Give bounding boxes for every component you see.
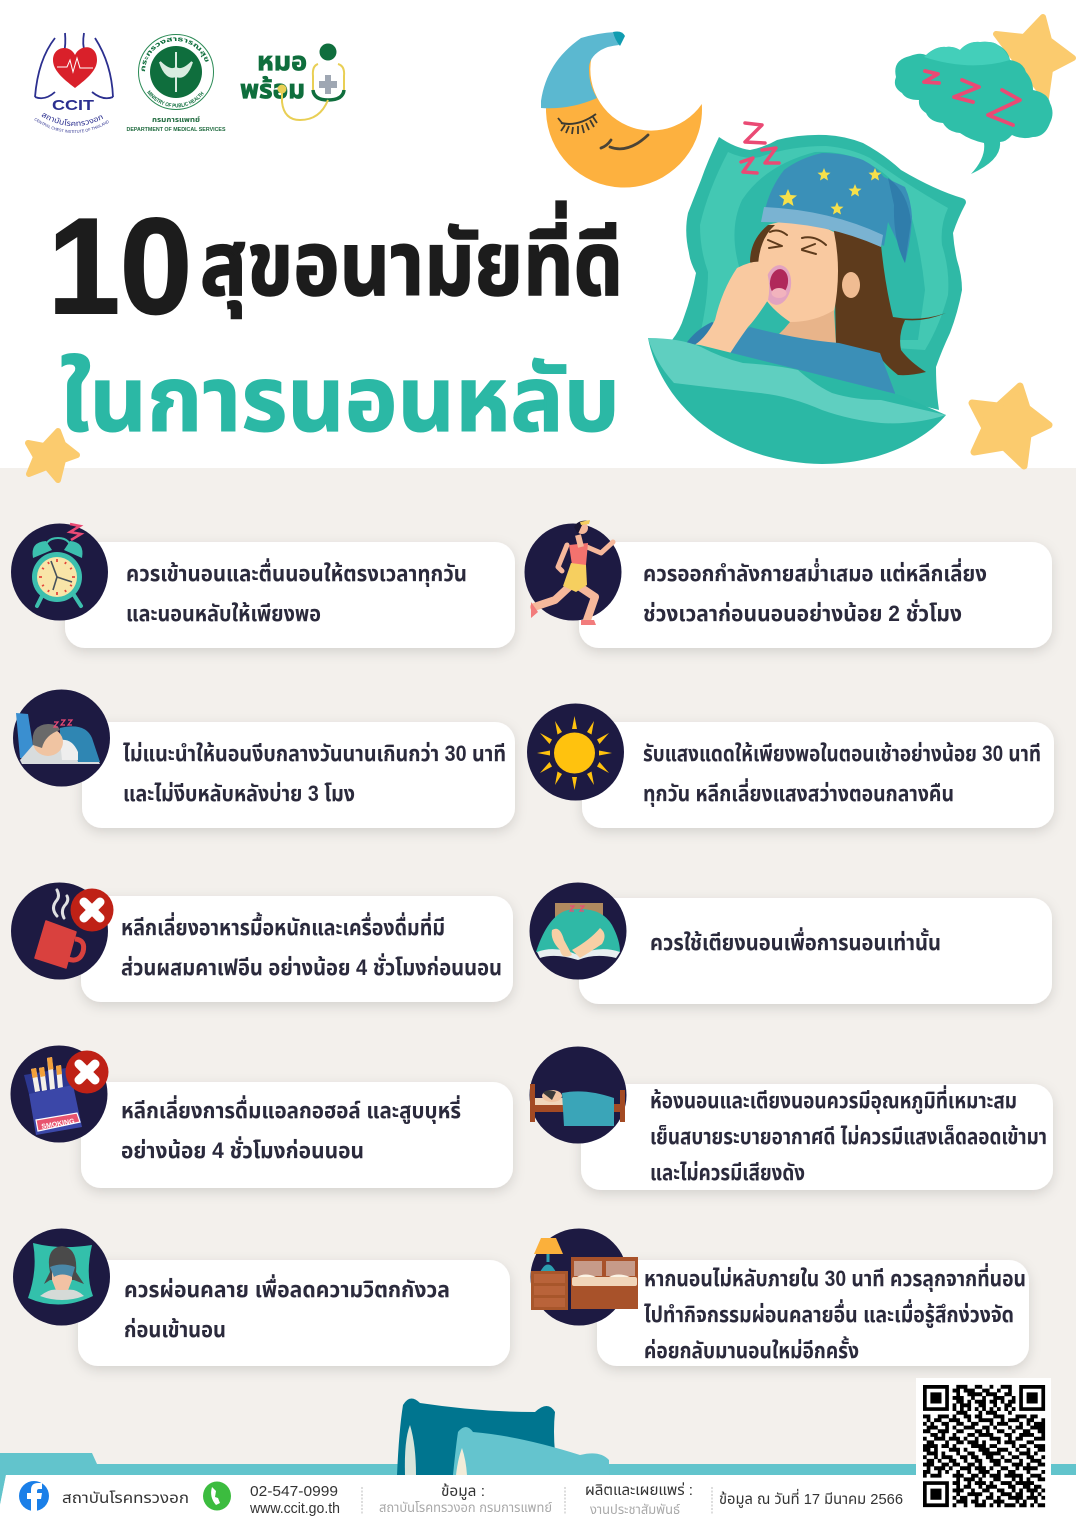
hand	[691, 262, 769, 363]
icon: thought cloud with star	[895, 17, 1073, 174]
tip 10: ไปทำกิจกรรมผ่อนคลายอื่น และเมื่อรู้สึกง่วงจัด	[644, 1299, 1014, 1328]
footer: institute name: สถาบันโรคทรวงอก	[62, 1490, 189, 1507]
footer: publisher: ผลิตและเผยแพร่ :	[585, 1481, 693, 1499]
tip 7	[527, 704, 1054, 828]
tip 2: และไม่งีบหลับหลังบ่าย 3 โมง	[123, 781, 355, 806]
snore letters	[741, 123, 779, 173]
tip 8	[530, 882, 1052, 1004]
logo: Ministry of Public Health: กระทรวงสาธารณสุข	[142, 37, 209, 72]
icon: woman with sleep mask	[28, 1243, 93, 1305]
tip 8: ควรใช้เตียงนอนเพื่อการนอนเท่านั้น	[650, 927, 941, 955]
title: 10 สุขอนามัยที่ดี: สุขอนามัยที่ดี	[200, 201, 623, 319]
tip 5	[13, 1228, 510, 1366]
hat stars	[779, 168, 882, 214]
footer: contact: www.ccit.go.th	[249, 1500, 340, 1517]
footer: publisher: งานประชาสัมพันธ์	[590, 1502, 680, 1517]
logo: Ministry of Public Health: กรมการแพทย์	[152, 116, 200, 124]
QR code	[916, 1378, 1051, 1513]
icon: red cross badge	[66, 1050, 108, 1094]
tip 1: ควรเข้านอนและตื่นนอนให้ตรงเวลาทุกวัน	[126, 558, 467, 587]
tip 6: ควรออกกำลังกายสม่ำเสมอ แต่หลีกเลี่ยง	[643, 558, 987, 586]
icon: person in bed	[530, 1084, 625, 1126]
tip 4: หลีกเลี่ยงการดื่มแอลกอฮอล์ และสูบบุหรี่	[121, 1095, 461, 1124]
footer: date: ข้อมูล ณ วันที่ 17 มีนาคม 2566	[719, 1488, 903, 1508]
illustration: yawning woman on pillow	[648, 123, 966, 464]
footer: contact: 02-547-0999	[250, 1483, 338, 1500]
logo: Ministry of Public Health	[126, 34, 226, 133]
tip 3: ส่วนผสมคาเฟอีน อย่างน้อย 4 ชั่วโมงก่อนนอน	[121, 953, 502, 980]
title: 10 สุขอนามัยที่ดี	[48, 190, 623, 342]
title: 10 สุขอนามัยที่ดี: 10	[48, 190, 192, 342]
icon: runner	[531, 520, 613, 625]
tip 5: ก่อนเข้านอน	[124, 1317, 226, 1342]
tip 6: ช่วงเวลาก่อนนอนอย่างน้อย 2 ชั่วโมง	[643, 599, 962, 626]
tip 4: อย่างน้อย 4 ชั่วโมงก่อนนอน	[121, 1136, 364, 1163]
icon: alarm clock	[32, 524, 82, 606]
hat	[762, 153, 912, 263]
footer teal band	[0, 1453, 1076, 1505]
tip 7: ทุกวัน หลีกเลี่ยงแสงสว่างตอนกลางคืน	[643, 778, 954, 807]
icon: stacked pillows	[397, 1398, 609, 1475]
icon: sleeping at laptop	[16, 713, 100, 764]
icon: sun	[537, 716, 612, 790]
icon: right star	[972, 386, 1049, 466]
footer: data source	[379, 1483, 552, 1515]
subtitle: ในการนอนหลับ: ในการนอนหลับ	[60, 349, 620, 451]
icon: sleeping moon	[541, 32, 702, 188]
tip 1	[11, 524, 515, 648]
footer white strip	[0, 1475, 1076, 1522]
icon: bedroom set	[531, 1238, 638, 1310]
logo: CCIT: สถาบันโรคทรวงอก	[42, 113, 104, 126]
icon: facebook	[19, 1481, 49, 1511]
logo: CCIT	[34, 32, 114, 133]
icon: cigarette pack	[24, 1057, 82, 1135]
tip 9	[530, 1046, 1053, 1190]
icon: phone	[203, 1482, 231, 1510]
body	[724, 327, 895, 410]
tip 6	[524, 520, 1052, 648]
footer: contact	[249, 1483, 340, 1517]
footer: data source: ข้อมูล :	[441, 1483, 485, 1500]
tip 9: และไม่ควรมีเสียงดัง	[650, 1160, 805, 1185]
tip 10: ค่อยกลับมานอนใหม่อีกครั้ง	[644, 1336, 859, 1363]
logo: CCIT: CCIT	[52, 97, 94, 114]
icon: feet in bed	[536, 903, 620, 960]
face	[755, 221, 838, 322]
icon: red cross badge	[70, 888, 114, 932]
logo: Ministry of Public Health: DEPARTMENT OF MEDICAL SERVICES	[126, 127, 226, 133]
pillow	[672, 135, 966, 410]
logo: Mor Prom: พร้อม	[240, 74, 305, 104]
tip 10: หากนอนไม่หลับภายใน 30 นาที ควรลุกจากที่นอน	[644, 1263, 1026, 1292]
hair back	[834, 228, 946, 375]
tip 3	[11, 882, 513, 1002]
eyes and brows	[768, 231, 826, 254]
content background panel	[0, 468, 1076, 1522]
tip 4	[10, 1046, 513, 1188]
footer: data source: สถาบันโรคทรวงอก กรมการแพทย์	[379, 1500, 552, 1515]
tip 1: และนอนหลับให้เพียงพอ	[126, 601, 321, 626]
hat band	[761, 207, 883, 247]
tip 9: ห้องนอนและเตียงนอนควรมีอุณหภูมิที่เหมาะสม	[650, 1085, 1017, 1114]
tip 10	[530, 1228, 1029, 1366]
logo: Ministry of Public Health: MINISTRY OF PUBLIC HEALTH	[147, 90, 204, 108]
icon: coffee mug	[35, 890, 84, 968]
mouth	[762, 263, 794, 307]
icon: cigarette pack: SMOKING	[41, 1118, 76, 1131]
blanket	[648, 338, 946, 464]
logo: Mor Prom	[240, 44, 344, 120]
logo: Mor Prom: หมอ	[257, 46, 307, 76]
tip 5: ควรผ่อนคลาย เพื่อลดความวิตกกังวล	[124, 1274, 450, 1302]
tip 2	[13, 690, 515, 828]
logo: CCIT: CENTRAL CHEST INSTITUTE OF THAILAND	[34, 118, 109, 133]
footer: publisher	[585, 1481, 693, 1517]
tip 2: ไม่แนะนำให้นอนงีบกลางวันนานเกินกว่า 30 นาที	[123, 741, 506, 766]
icon: left star	[28, 431, 77, 480]
tip 3: หลีกเลี่ยงอาหารมื้อหนักและเครื่องดื่มที่มี	[121, 912, 445, 940]
